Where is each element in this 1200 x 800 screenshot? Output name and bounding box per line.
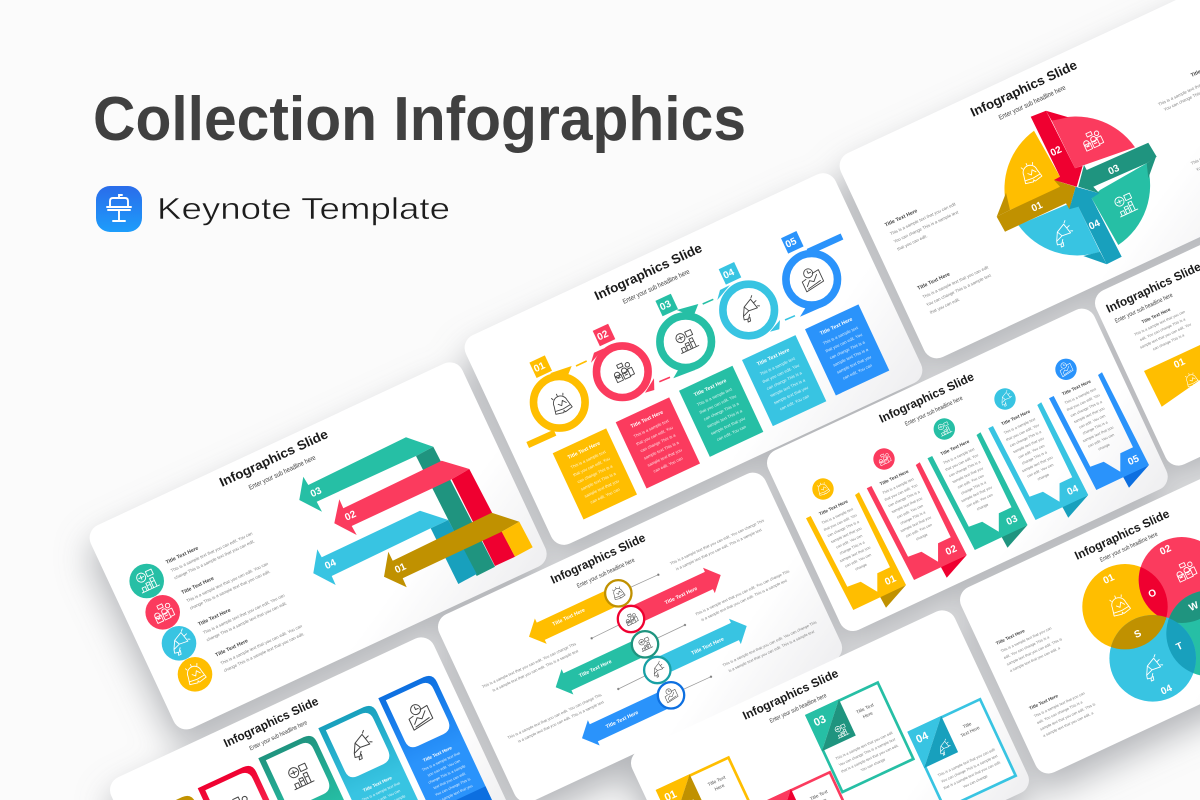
tab 05: that you can edit. You	[1066, 393, 1100, 412]
folded arrow graphic: 01	[393, 561, 408, 576]
card blue: text that you can edit.	[433, 771, 467, 790]
card red	[198, 763, 315, 800]
tab 04: sample text that you	[1012, 436, 1045, 454]
slide subheading: Enter your sub headline here	[904, 395, 964, 428]
venn diagram	[1082, 537, 1200, 702]
list item 1: This is a sample text that you can edit. You can	[170, 530, 254, 573]
step 01 ring	[528, 355, 587, 445]
text box 03: sample text This is a	[706, 408, 743, 429]
tab 03: change This is a	[960, 480, 988, 496]
slide heading: Infographics Slide	[740, 666, 841, 723]
tab 02: sample text that you	[900, 515, 932, 533]
list item 2: change This is a sample text that you can edit.	[189, 569, 271, 611]
description text left 2: This is a sample text that you can edit. You can change This	[507, 692, 602, 740]
text box 05: can change This is a	[829, 339, 866, 360]
tab 02	[867, 448, 967, 580]
card blue: You can change This is	[434, 777, 471, 797]
card 03	[805, 681, 913, 793]
icon circle: red	[145, 595, 180, 630]
circular arrow pie chart: 01	[1030, 200, 1045, 215]
list item 3: change This is a sample text that you can edit.	[206, 600, 288, 642]
tab 02: change	[915, 533, 928, 541]
list item 1	[165, 522, 257, 581]
tab 02: Title Text Here	[879, 469, 910, 487]
slide subheading: Enter your sub headline here	[622, 269, 691, 306]
tab 04	[988, 388, 1088, 520]
text box 02: Title Text Here	[630, 410, 664, 430]
card blue: This is a sample text that	[421, 751, 461, 772]
venn diagram: O	[1147, 587, 1159, 601]
text box 03: sample text that you	[710, 415, 747, 436]
tab 03	[928, 418, 1028, 550]
card blue: change This is a sample	[428, 764, 466, 785]
text block 1	[995, 615, 1066, 673]
tab 03: This is a sample text	[943, 447, 976, 465]
list item 1: Title Text Here	[165, 545, 200, 566]
card 04: that is a sample text that you can edit.	[943, 760, 1002, 790]
circular arrow pie chart: 02	[1049, 144, 1064, 159]
card 03: This is a sample text that you can edit	[835, 730, 894, 761]
tab 01: 01	[883, 573, 898, 588]
description text right 1: is a sample text that you can edit. This is a sample text	[675, 527, 763, 571]
tab 04: change This is a	[1021, 450, 1048, 466]
tab 02: change This is a	[900, 510, 927, 526]
description text left 1: This is a sample text that you can edit. You can change This	[481, 641, 577, 689]
card cyan	[318, 703, 436, 800]
icon circle: yellow	[178, 657, 212, 692]
tab 04: can change This is a	[1009, 429, 1043, 448]
node: cyan	[644, 657, 670, 683]
arrow labels: Title Text Here	[691, 636, 725, 657]
text block 2: edit. You can change This is a	[1036, 700, 1084, 725]
tab 02: 02	[944, 543, 959, 558]
folded arrow graphic: 02	[343, 509, 358, 524]
tab 02: can edit. You can	[896, 504, 924, 519]
description text left 2: is a sample text that you can edit. This is a sample text	[517, 699, 605, 744]
text box 05: sample text This is a	[832, 347, 869, 367]
tab 01	[806, 478, 906, 610]
text box 04: can edit. You can	[779, 393, 810, 411]
tab 01: can edit. You can	[835, 534, 863, 549]
text block 2	[1028, 680, 1099, 738]
tab 01: can change This is a	[827, 519, 861, 538]
tab 02: sample text that you	[891, 496, 923, 514]
arrow labels: Title Text Here	[552, 607, 586, 628]
venn diagram: S	[1133, 628, 1144, 641]
arrow labels: Title Text Here	[664, 586, 699, 606]
circular arrow pie chart: 04	[1087, 218, 1102, 233]
tab 05: can edit. You can	[1087, 433, 1115, 449]
card 03: Here	[862, 710, 874, 720]
card 04: 04	[914, 730, 931, 746]
card 01	[656, 756, 764, 800]
text box 03	[679, 366, 763, 457]
text box 02: that you can edit. You	[635, 425, 674, 446]
text box 02: sample text This is a	[643, 440, 680, 460]
card 01: Here	[714, 783, 726, 793]
text block left 2: You can change This is a sample text	[925, 272, 992, 307]
text box 01: that you can edit. You	[572, 456, 611, 477]
tab 04: that you can edit. You	[1005, 423, 1040, 442]
tab 01: change This is a	[839, 540, 866, 556]
text box 05: can edit. You can	[842, 362, 873, 381]
tab 05: change	[1098, 443, 1110, 451]
arrow: teal left	[550, 632, 652, 700]
card 04: This is a sample text that you can edit	[937, 747, 997, 778]
slide subheading: Enter your sub headline here	[576, 557, 636, 590]
tab 05: sample text that you	[1082, 425, 1114, 443]
node: blue	[658, 682, 684, 708]
tab 05: This is a sample text	[1064, 387, 1098, 405]
description text right 1: This is a sample text that you can edit. You can change This	[669, 518, 765, 566]
text block	[1130, 302, 1195, 356]
slide heading: Infographics Slide	[877, 369, 976, 426]
text box 01: sample text that you	[584, 478, 620, 499]
tab 01: sample text that you	[839, 545, 871, 563]
arrow labels: Title Text Here	[605, 710, 640, 730]
tab 01: that you can edit. You	[823, 513, 857, 532]
text box 04: Title Text Here	[756, 347, 791, 368]
tab 03: that you can edit. You	[945, 453, 979, 472]
tab 05: sample text that you	[1073, 406, 1105, 424]
text box 01: can edit. You can	[589, 486, 621, 505]
text box 03: can edit. You can	[716, 424, 747, 442]
tab 04: can edit. You can	[1027, 463, 1054, 479]
slide subheading: Enter your sub headline here	[248, 719, 309, 752]
step 03 ring: 03	[658, 299, 673, 313]
text block 1: This is a sample text that you can	[1000, 626, 1052, 653]
card 03: You can change This is a sample text	[838, 737, 897, 767]
circular arrow pie chart	[997, 111, 1157, 264]
card blue: Title Text Here	[422, 745, 453, 763]
text box 02: This is a sample text	[633, 418, 670, 439]
text block 1: Title Text Here	[995, 628, 1026, 646]
panel: stepped circles slide	[460, 169, 927, 549]
tab 01: can edit. You can	[844, 553, 872, 569]
arrow labels: Title Text Here	[578, 659, 613, 679]
slide heading: Infographics Slide	[968, 57, 1079, 120]
panel: circular arrows slide	[835, 0, 1200, 363]
slide subheading: Enter your sub headline here	[1099, 531, 1159, 564]
tab 03: 03	[1005, 513, 1020, 528]
text box 01: This is a sample text	[570, 449, 607, 470]
card blue: you can edit. You can	[427, 759, 461, 777]
text block left 1: Title Text Here	[884, 208, 919, 229]
text block 2: a sample text that you can edit. a	[1042, 711, 1095, 738]
text box 04: that you can edit. You	[762, 362, 801, 384]
text box 04: sample text that you	[773, 385, 810, 405]
text block: edit. You can change This is a	[1139, 317, 1187, 342]
slide subheading: Enter your sub headline here	[248, 455, 317, 492]
list item 4: Title Text Here	[215, 638, 249, 659]
subtitle: Keynote Template	[157, 191, 450, 226]
panel: framed squares slide	[626, 606, 1034, 800]
card yellow	[137, 793, 254, 800]
venn diagram: T	[1175, 641, 1185, 653]
step 02 ring	[591, 324, 670, 398]
text box 02: can edit. You can	[652, 455, 684, 474]
panel: rounded cards slide	[105, 633, 513, 800]
card 04: Text Here	[960, 725, 981, 739]
slide heading: Infographics Slide	[548, 530, 648, 587]
text block 1: a sample text that you can edit. a	[1009, 646, 1062, 673]
slide heading: Infographics Slide	[1072, 506, 1172, 563]
tab 03: can edit. You can	[957, 474, 985, 489]
panel: crossing arrows slide	[433, 468, 847, 800]
card 01: Title Text	[707, 774, 727, 788]
text block 1: sample text that you can edit. This is	[1006, 637, 1063, 667]
tab 01: sample text that you	[830, 526, 862, 544]
tab 04: can edit. You can	[1018, 444, 1045, 459]
card 02	[757, 771, 865, 800]
list item 2: Title Text Here	[181, 576, 215, 596]
text block: Title Text Here	[1141, 307, 1172, 325]
text block right 1	[1157, 58, 1200, 113]
tab 05	[1049, 359, 1149, 490]
list item 1: change This is a sample text that you can edit.	[173, 538, 255, 580]
tab 03: sample text that you	[952, 466, 984, 484]
icon: keynote app	[96, 186, 142, 232]
text box 01: can change This is a	[576, 463, 614, 484]
circular arrow pie chart: 03	[1107, 163, 1122, 178]
text box 02: sample text that you	[647, 447, 683, 468]
slide subheading: Enter your sub headline here	[1114, 292, 1174, 325]
text box 04: sample text This is a	[769, 377, 806, 398]
tab 03: change	[976, 503, 989, 511]
panel: venn slide	[960, 479, 1200, 774]
text block 2: sample text that you can edit. This is	[1039, 702, 1096, 732]
tab 03: can edit. You can	[966, 493, 993, 509]
card 03: You can change	[860, 757, 886, 772]
list item 2: This is a sample text that you can edit. You can	[186, 561, 269, 603]
panel: bookmark tabs slide	[762, 304, 1172, 636]
tab 04: 04	[1066, 483, 1081, 498]
list item 3	[197, 584, 289, 643]
tab 03: can change This is a	[948, 459, 982, 478]
list item 3: Title Text Here	[197, 607, 232, 628]
text box 03: can change This is a	[703, 401, 740, 422]
tab 05: can change This is a	[1070, 399, 1104, 418]
text block left 1: that you can edit.	[896, 233, 928, 252]
text box 05: Title Text Here	[819, 317, 854, 337]
step 02 ring: 02	[596, 329, 611, 343]
list item 4	[215, 615, 307, 673]
tab 03: Title Text Here	[940, 439, 970, 457]
text block: This is a sample text that you can	[1134, 310, 1186, 337]
venn diagram: 01	[1102, 572, 1117, 587]
arrow labels	[552, 586, 725, 730]
text block left 2	[917, 255, 997, 315]
yellow block	[1144, 345, 1200, 407]
text box 01: Title Text Here	[567, 441, 601, 461]
text block: can change This is a	[1152, 333, 1186, 351]
text box 01: sample text This is a	[580, 471, 617, 491]
text box 03: that you can edit. You	[699, 393, 738, 415]
node: teal	[632, 631, 658, 658]
step 05 ring	[781, 231, 842, 317]
card teal	[258, 733, 376, 800]
text box 04	[742, 335, 826, 426]
node: red	[618, 606, 644, 632]
tab 01: change	[855, 563, 867, 571]
list item 4: change This is a sample text that you can edit.	[223, 631, 305, 673]
step 01 ring: 01	[532, 360, 547, 375]
icon circle: cyan	[162, 626, 196, 661]
list item 3: This is a sample text that you can edit. You can	[202, 592, 286, 635]
slide subheading: Enter your sub headline here	[769, 692, 828, 725]
step 04 ring: 04	[722, 267, 737, 282]
description text left 1: is a sample text that you can edit. This is a sample text	[491, 648, 580, 693]
list item 4: This is a sample text that you can edit. You can	[220, 623, 303, 666]
tab 05: Title Text Here	[1061, 379, 1092, 397]
tab 02: can change This is a	[888, 489, 921, 508]
tab 04: sample text that you	[1021, 455, 1053, 473]
folded arrow graphic: 04	[323, 557, 338, 572]
text box 03: This is a sample text	[696, 386, 734, 407]
tab 03: sample text that you	[961, 485, 993, 503]
panel: folded arrows slide	[85, 358, 551, 734]
panel: partial right slide	[1090, 144, 1200, 470]
leader lines	[591, 574, 712, 695]
text box 03: Title Text Here	[693, 378, 728, 398]
text box 01	[553, 428, 637, 519]
tab 05: can edit. You can	[1078, 414, 1106, 429]
card 03: 03	[812, 713, 828, 729]
card blue	[378, 673, 496, 800]
text box 04: This is a sample text	[759, 355, 797, 376]
slide subheading: Enter your sub headline here	[998, 85, 1067, 122]
text block left 2: This is a sample text that you can edit	[922, 264, 990, 300]
text block 2: Title Text Here	[1028, 693, 1059, 711]
tab 02: can edit. You can	[905, 523, 933, 539]
tab 01: This is a sample text	[821, 507, 855, 525]
text box 02: can change This is a	[639, 432, 677, 453]
card 03: that is a sample text that you can edit.	[841, 743, 899, 774]
text block left 2: Title Text Here	[917, 271, 951, 292]
tab 04: Title Text Here	[1000, 409, 1031, 427]
slide heading: Infographics Slide	[221, 694, 321, 750]
description text right 3: This is a sample text that you can edit. You can change This	[722, 619, 817, 668]
text block 1: edit. You can change This is a	[1003, 635, 1051, 660]
card 04	[907, 698, 1016, 800]
text box 05: that you can edit. You	[825, 332, 864, 353]
tab 02: that you can edit. You	[884, 483, 918, 502]
text box 05	[805, 304, 889, 395]
slide heading: Infographics Slide	[592, 240, 704, 303]
node: yellow	[605, 580, 632, 606]
arrow: blue left	[576, 683, 679, 751]
tab 05: 05	[1126, 453, 1141, 468]
tab 05: change This is a	[1082, 420, 1109, 436]
tab 04: change	[1037, 473, 1050, 481]
step 05 ring: 05	[784, 236, 799, 251]
card 04: You can change	[962, 774, 988, 789]
venn diagram: 04	[1159, 683, 1174, 698]
icon circle: teal	[129, 564, 164, 598]
description text right 3: is a sample text that you can edit. This is a sample text	[727, 628, 816, 673]
text box 05: sample text that you	[836, 354, 873, 375]
main title: Collection Infographics	[93, 85, 746, 154]
text block left 1: You can change This is a sample text	[893, 209, 960, 244]
card 04: Title	[962, 721, 973, 730]
description text right 2: This is a sample text that you can edit. You can change This	[694, 568, 790, 617]
tab 01: Title Text Here	[818, 499, 849, 517]
step 03 ring	[655, 294, 713, 378]
arrow: cyan right	[650, 613, 753, 681]
list item 2	[181, 552, 273, 611]
text block: sample text that you can edit. You	[1139, 322, 1192, 350]
text block left 2: that you can edit.	[929, 297, 961, 315]
folded arrow graphic: 03	[309, 485, 324, 500]
yellow block: 01	[1172, 356, 1187, 371]
text block 2: This is a sample text that you can	[1033, 691, 1085, 718]
description text right 2: is a sample text that you can edit. This is a sample text	[700, 577, 789, 622]
text box 04: can change This is a	[766, 370, 803, 391]
arrow: red right	[624, 562, 727, 630]
arrow: yellow left	[523, 582, 626, 649]
card 04: You can change This is a sample text	[940, 754, 999, 784]
step 04 ring	[717, 262, 795, 336]
tab 04: This is a sample text	[1003, 417, 1037, 435]
tab 02: This is a sample text	[882, 477, 915, 495]
text box 02	[616, 397, 700, 488]
text box 05: This is a sample text	[822, 325, 860, 346]
card cyan: Title Text Here	[362, 775, 393, 793]
text block left 1	[884, 192, 964, 252]
card 03: Title Text	[855, 702, 876, 716]
venn diagram: 02	[1158, 543, 1173, 558]
text block left 1: This is a sample text that you can edit	[889, 201, 957, 236]
slide heading: Infographics Slide	[217, 426, 330, 490]
folded arrow graphic	[299, 437, 533, 587]
